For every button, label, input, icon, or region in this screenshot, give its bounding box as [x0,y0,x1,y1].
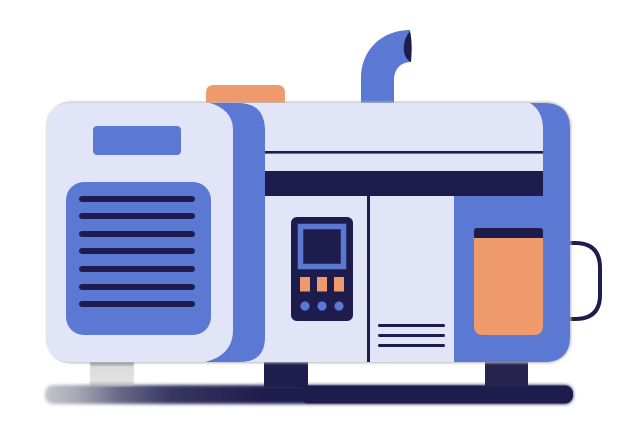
control panel [291,217,353,321]
top thin line [265,151,543,154]
blue indicators [300,301,344,311]
exhaust pipe [361,30,412,104]
body shadow edge [47,102,571,363]
foot: right [485,362,528,387]
foot: centre [264,362,308,387]
body: front blue band [205,103,265,362]
dark band [265,171,543,196]
label plate [93,126,181,155]
orange buttons [300,277,344,292]
base skid [45,385,573,404]
fuel tank [474,228,543,335]
vent slats [79,196,195,307]
body: main casing [47,103,570,362]
handle [570,243,600,319]
vent panel [66,182,211,335]
body: right blue panel [454,103,570,362]
generator body [47,103,570,362]
door divider [367,196,370,362]
door vent lines [378,324,445,347]
foot: left [90,362,134,386]
screen [300,226,344,266]
orange filler cap [206,85,285,104]
